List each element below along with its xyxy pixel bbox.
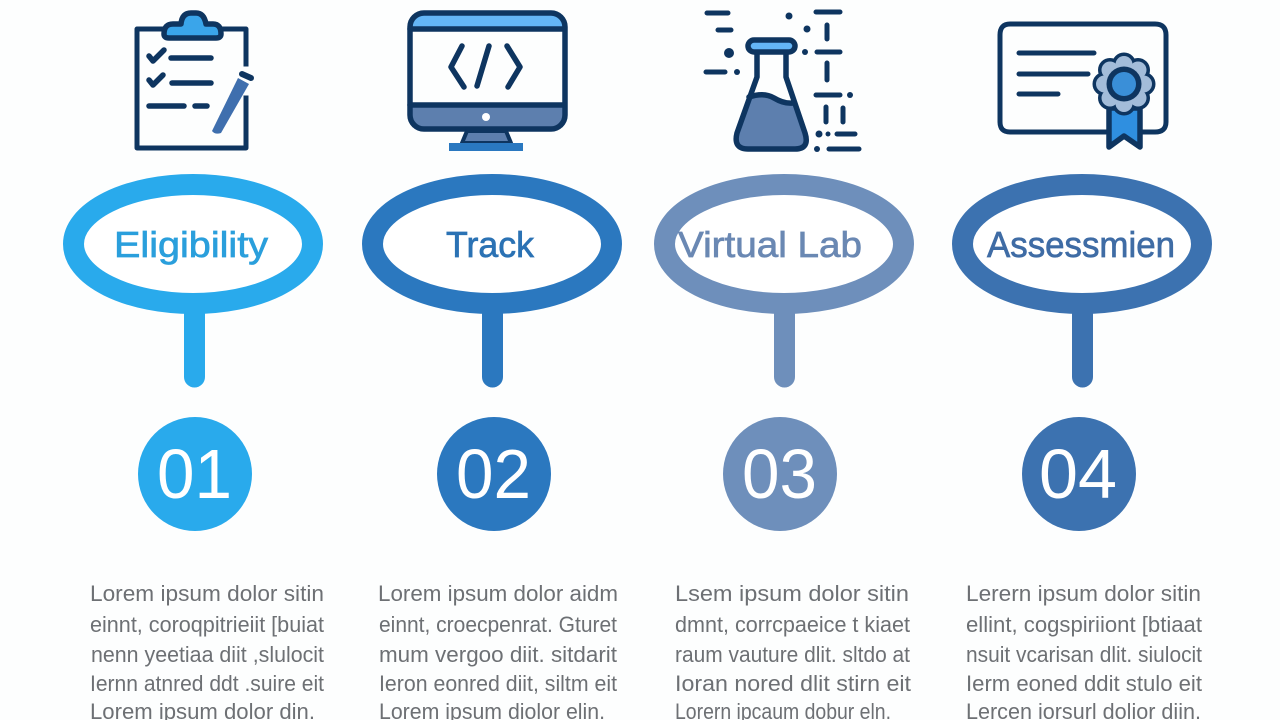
body text 2: Ieron eonred diit, siltm eit [379,671,617,696]
heading: Virtual Lab: Virtual Lab [678,224,862,265]
icon: flask with data marks [706,12,859,152]
icon: certificate with rosette [1000,24,1166,147]
body text 1 [90,581,324,720]
connector stem 3 [774,312,795,388]
body text 3: dmnt, corrcpaeice t kiaet [675,612,910,637]
number badge 02 [437,417,551,531]
panel: step 4 Assessment [962,24,1202,720]
body text 4: Lerern ipsum dolor sitin [966,581,1201,606]
ring: Virtual Lab [664,184,904,304]
body text 2 [378,581,618,720]
ring: Assessmien [962,184,1202,304]
icon: clipboard with checklist and pen [137,13,251,148]
icon: monitor with code symbol [410,13,565,151]
body text 3 [675,581,911,720]
body text 3: Lsem ipsum dolor sitin [675,581,909,606]
panel: step 3 Virtual Lab [664,12,911,720]
body text 2: einnt, croecpenrat. Gturet [379,612,617,637]
number badge 04: 04 [1039,435,1117,513]
heading: Assessmien: Assessmien [987,224,1175,265]
heading: Track: Track [446,224,535,265]
body text 1: nenn yeetiaa diit ,slulocit [91,642,324,667]
connector stem 1 [184,312,205,388]
number badge 03: 03 [742,435,817,513]
number badge 03 [723,417,837,531]
panel: step 1 Eligibility [74,13,324,720]
panel: step 2 Track [372,13,618,720]
body text 4: nsuit vcarisan dlit. siulocit [966,642,1202,667]
ring: Eligibility [74,184,312,304]
connector stem 4 [1072,312,1093,388]
body text 4 [966,581,1202,720]
ring: Track [372,184,612,304]
connector stem 2 [482,312,503,388]
body text 1: Lorem ipsum dolor sitin [90,581,324,606]
body text 3: Ioran nored dlit stirn eit [675,671,911,696]
number badge 04 [1022,417,1136,531]
heading: Eligibility: Eligibility [114,224,268,265]
body text 4: ellint, cogspiriiont [btiaat [966,612,1202,637]
number badge 01: 01 [157,435,232,513]
body text 4: Ierm eoned ddit stulo eit [966,671,1202,696]
body text 2: Lorem ipsum dolor aidm [378,581,618,606]
body text 3: raum vauture dlit. sltdo at [675,642,910,667]
number badge 01 [138,417,252,531]
body text 1: einnt, coroqpitrieiit [buiat [90,612,324,637]
body text 2: mum vergoo diit. sitdarit [379,642,617,667]
body text 1: Iernn atnred ddt .suire eit [90,671,324,696]
number badge 02: 02 [456,435,531,513]
